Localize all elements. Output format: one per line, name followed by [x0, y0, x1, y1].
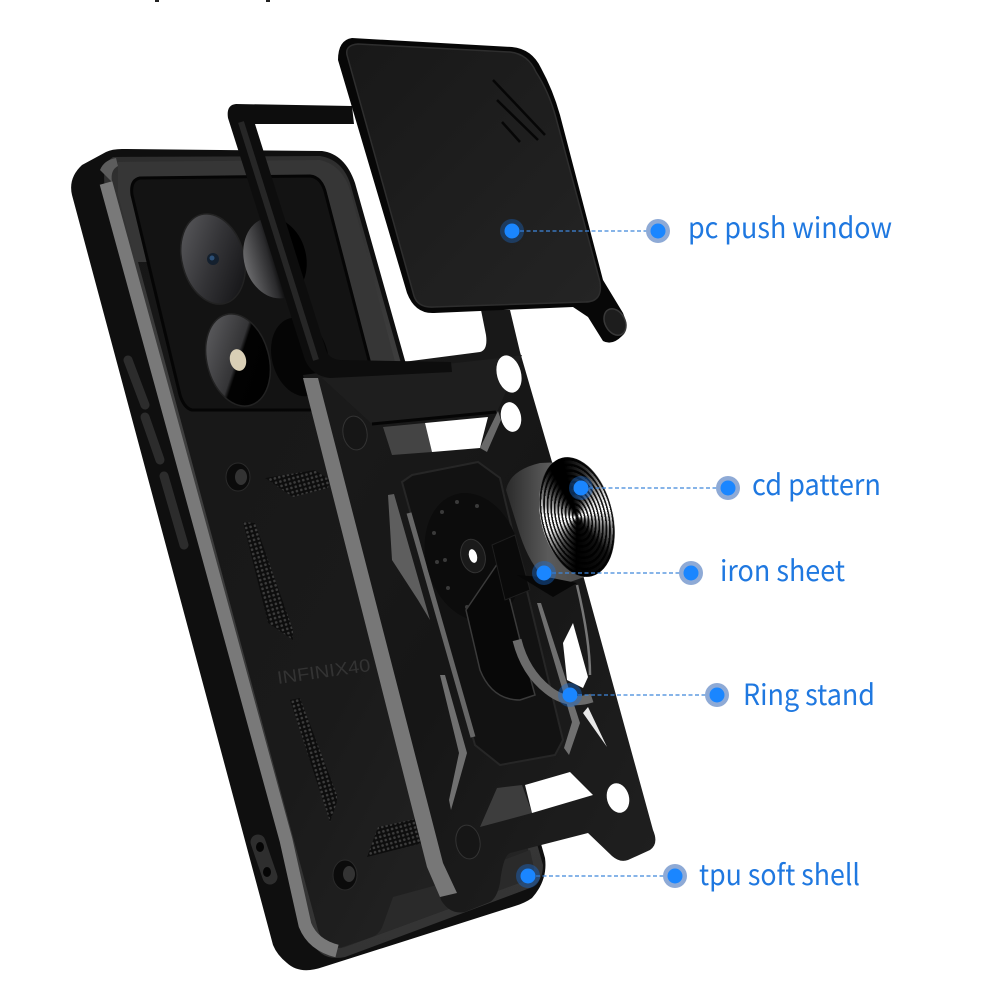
centre octagon plate [402, 462, 563, 765]
rim band around camera module [118, 160, 405, 410]
callout: cd pattern [569, 462, 881, 504]
textured patch 4 [367, 818, 423, 857]
side button 3 [164, 476, 184, 545]
rotating disc base [411, 482, 535, 632]
lens 4 [263, 311, 337, 403]
cut-off text fragments at top edge [155, 0, 270, 2]
cd holder body [506, 462, 590, 597]
textured patch 1 [265, 470, 330, 497]
screw bottom [333, 860, 357, 890]
ring stand [517, 640, 592, 701]
callout: cd pattern: cd pattern [752, 462, 881, 504]
frame highlight [241, 122, 316, 360]
callout: pc push window [500, 205, 892, 247]
callout: iron sheet [532, 548, 845, 590]
callout: tpu soft shell [516, 852, 860, 894]
phone body [71, 149, 545, 970]
holder black wedge [517, 575, 577, 597]
case main shape [303, 310, 655, 912]
textured patch 3 [290, 698, 337, 822]
lower back panel notch [340, 850, 534, 948]
grey strip B [409, 513, 473, 737]
oblong ring plate [466, 560, 535, 700]
cd pattern disc [527, 449, 627, 585]
phone outer shell [71, 149, 545, 970]
side button 2 [145, 417, 160, 460]
hole 2 [498, 400, 524, 434]
hole 3 [603, 781, 633, 815]
grey strip A [388, 494, 430, 620]
slash marks [493, 80, 545, 142]
pc push window [338, 38, 630, 343]
grey top corner [100, 158, 118, 182]
grey chevron D [537, 603, 580, 755]
screw top [226, 463, 250, 491]
lens 1 [171, 207, 255, 311]
callout: ring stand [558, 672, 875, 714]
phone rim face [104, 156, 543, 958]
lens 2 [234, 210, 316, 306]
window outer shape [338, 38, 626, 343]
upper plate [322, 355, 522, 424]
charging port capsule [256, 842, 271, 877]
window face [347, 44, 600, 307]
phone visible through upper window [383, 423, 432, 455]
textured patch 2 [243, 522, 293, 640]
ring right side [577, 585, 590, 675]
upper plate shadow line [372, 412, 496, 424]
sliding frame [228, 104, 452, 378]
hole 1 [492, 353, 526, 395]
case grey edge strip [303, 378, 457, 897]
white diamond opening [563, 623, 588, 688]
grey side strip [106, 183, 337, 951]
embossed brand text: INFINIX40 [276, 655, 372, 688]
grey facet [480, 411, 501, 452]
white triangle opening [583, 707, 607, 747]
callout: tpu soft shell: tpu soft shell [699, 852, 860, 894]
lower phone through window [480, 785, 532, 827]
pin top [340, 414, 370, 452]
callout: pc push window: pc push window [688, 205, 892, 247]
lower white window [525, 772, 593, 813]
grey chevron C [440, 675, 467, 810]
callout: ring stand: Ring stand [743, 672, 875, 714]
callout: iron sheet: iron sheet [720, 548, 845, 590]
bracket [492, 535, 530, 600]
side button 1 [128, 360, 145, 405]
phone back face [119, 168, 533, 948]
armor case [303, 310, 655, 912]
frame outline [228, 104, 452, 378]
pin bottom [453, 823, 483, 861]
camera module [132, 176, 382, 410]
hinge knob [600, 305, 630, 339]
lens 3 with flash [196, 307, 280, 413]
upper white window [425, 417, 488, 452]
